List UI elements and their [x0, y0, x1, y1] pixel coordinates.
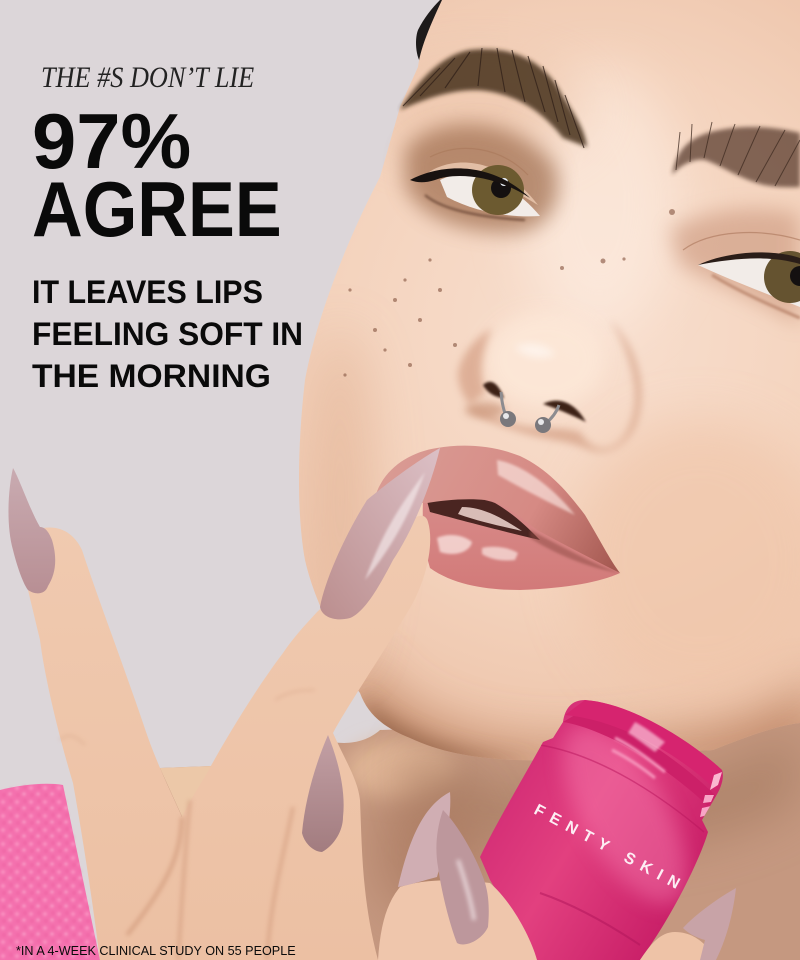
right eyebrow: [672, 122, 800, 187]
fingers over jar: [378, 880, 705, 960]
nail: lower left: [398, 792, 450, 887]
freckles: [343, 209, 675, 377]
mouth opening: [427, 498, 540, 540]
headline: 97% agree: 97%: [32, 97, 191, 185]
footnote: *IN A 4-WEEK CLINICAL STUDY ON 55 PEOPLE: [16, 943, 296, 958]
nail: lower centre: [436, 810, 489, 945]
product jar: [480, 700, 723, 960]
finger creases: [60, 690, 315, 960]
nail: lower right: [683, 888, 736, 960]
upper lip: [376, 446, 620, 573]
nail: middle finger: [302, 735, 344, 852]
sparkly pink top: [0, 784, 100, 960]
face: [299, 0, 800, 760]
hand: fingers and palm: [27, 516, 430, 960]
nose: [458, 312, 641, 452]
hair: [416, 0, 466, 66]
nail: index finger: [320, 448, 440, 619]
neck and chest: [100, 715, 800, 960]
lips: [376, 446, 620, 590]
subheading: FEELING SOFT IN: [32, 316, 303, 352]
left eye socket shadow: [405, 124, 558, 232]
right eye socket shadow: [670, 209, 800, 325]
jar brand text: FENTY SKIN: [531, 802, 689, 896]
left eyebrow: [400, 48, 587, 148]
nail: far left: [8, 468, 55, 593]
subheading: IT LEAVES LIPS: [32, 274, 263, 310]
right eye: [683, 233, 800, 318]
headline: 97% agree: AGREE: [32, 165, 282, 253]
subheading: THE MORNING: [32, 358, 271, 394]
subheading: [32, 274, 303, 394]
lower lip: [423, 493, 620, 590]
eyebrow heading: THE #S DON’T LIE: [41, 61, 254, 94]
headline: 97% agree: [32, 97, 282, 253]
septum ring: [500, 392, 559, 433]
jaw shadow: [358, 652, 800, 760]
left eye: [410, 148, 540, 220]
